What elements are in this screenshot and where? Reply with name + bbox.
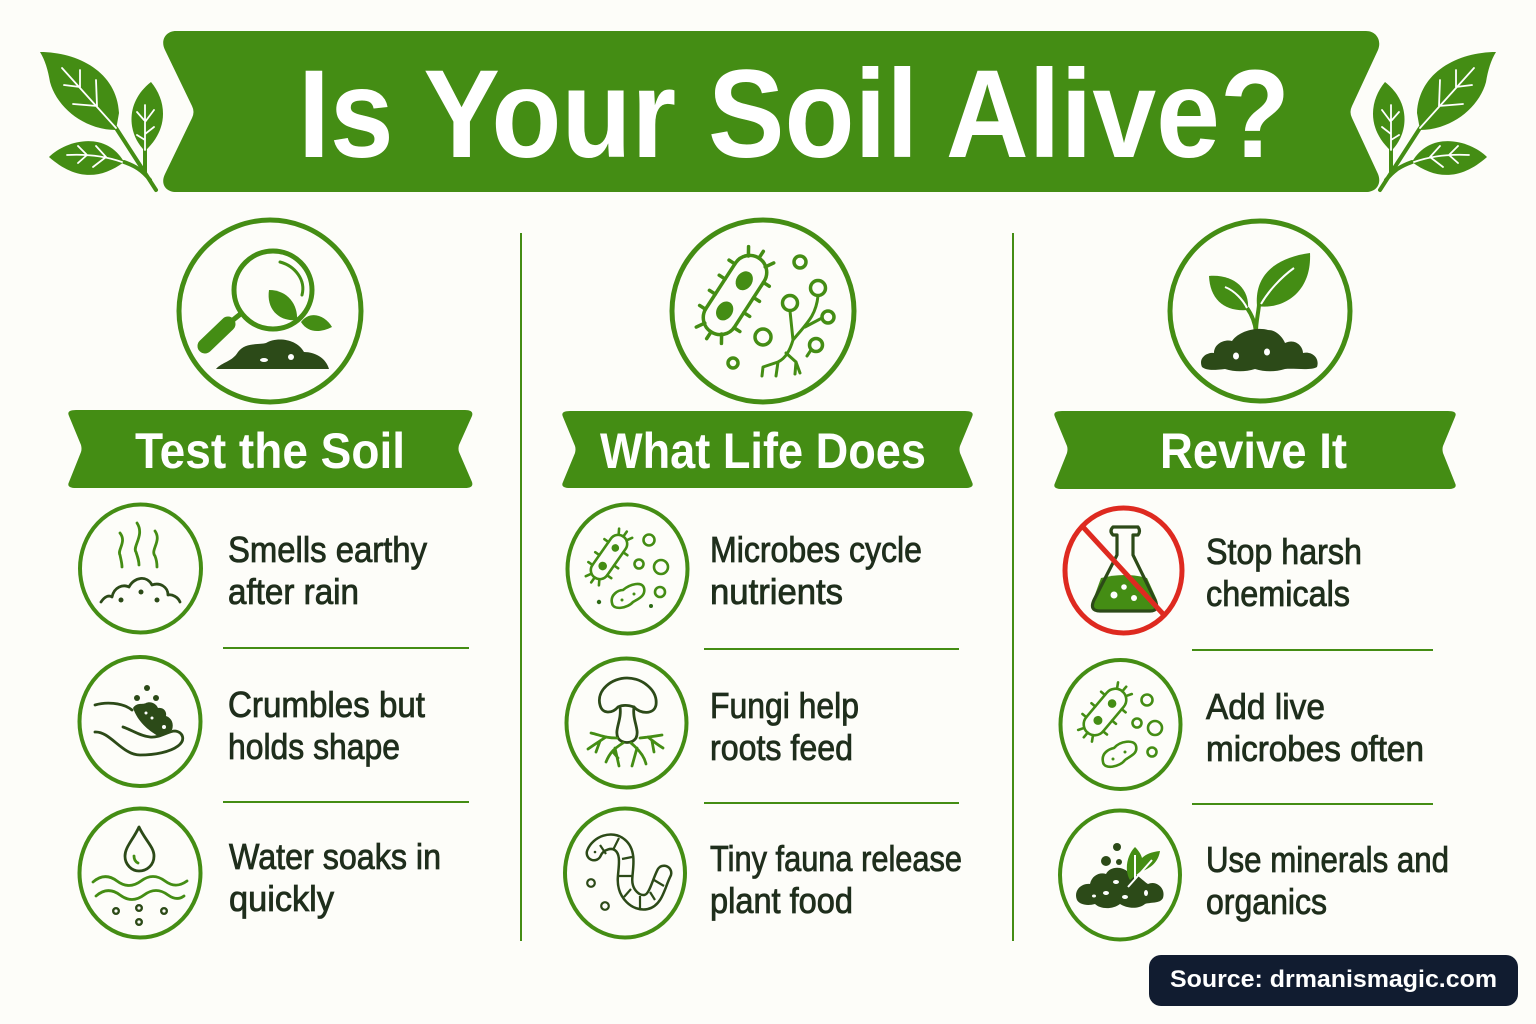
panel: revive it [1054,221,1456,940]
text: quickly [229,878,334,919]
text: Fungi help [710,685,859,726]
icon: microbes [568,504,688,634]
text [1206,686,1424,769]
text: after rain [228,571,359,612]
icon: earthworm [565,808,685,938]
icon: soil with leaf [1060,810,1180,940]
heading ribbon: revive it: Revive It [1160,423,1347,479]
item: minerals and organics [1060,810,1449,940]
source badge: Source: drmanismagic.com [1170,966,1497,993]
item: crumbles [80,657,425,786]
icon: steam over soil [80,504,201,632]
text: plant food [710,880,853,921]
text [710,529,922,612]
icon: crossed-out flask [1065,508,1182,633]
heading ribbon: what life does [562,411,973,488]
text [229,836,441,919]
item: smells earthy [80,504,427,632]
heading ribbon: revive it [1054,411,1456,489]
icon: leaves right [1373,52,1496,190]
text: organics [1206,881,1327,922]
text [228,529,427,612]
text: roots feed [710,727,853,768]
item: fungi help [566,658,859,788]
item: tiny fauna [565,808,962,938]
icon: leaves left [40,52,163,190]
text: Water soaks in [229,836,441,877]
item: water soaks [80,808,441,938]
heading ribbon: what life does: What Life Does [600,423,926,479]
source badge [1149,955,1518,1006]
text [710,685,859,768]
icon: live microbes [1060,660,1180,789]
text: Use minerals and [1206,839,1449,880]
text: Tiny fauna release [710,838,962,879]
icon: sprout in soil [1170,221,1350,401]
text [1206,839,1449,922]
text: Microbes cycle [710,529,922,570]
title banner: Is Your Soil Alive? [298,45,1290,184]
item: microbes cycle [568,504,922,634]
text: holds shape [228,726,400,767]
column dividers [521,233,1013,941]
icon: hand with soil [80,657,200,786]
text: chemicals [1206,573,1350,614]
icon: microbes and mycelium [672,220,854,402]
panel: test the soil [68,220,472,938]
heading ribbon: test the soil: Test the Soil [135,423,405,479]
text: microbes often [1206,728,1424,769]
text: Stop harsh [1206,531,1362,572]
text [710,838,962,921]
icon: magnifier over soil [179,220,361,402]
icon: water drop [80,808,200,938]
text [228,684,425,767]
text: Crumbles but [228,684,425,725]
icon: mushroom with roots [566,658,686,788]
heading ribbon: test the soil [68,410,472,488]
panel: what life does [562,220,973,938]
text: Add live [1206,686,1325,727]
text [1206,531,1362,614]
item: stop chemicals [1065,508,1362,633]
item: add microbes [1060,660,1424,789]
text: nutrients [710,571,843,612]
text: Smells earthy [228,529,427,570]
